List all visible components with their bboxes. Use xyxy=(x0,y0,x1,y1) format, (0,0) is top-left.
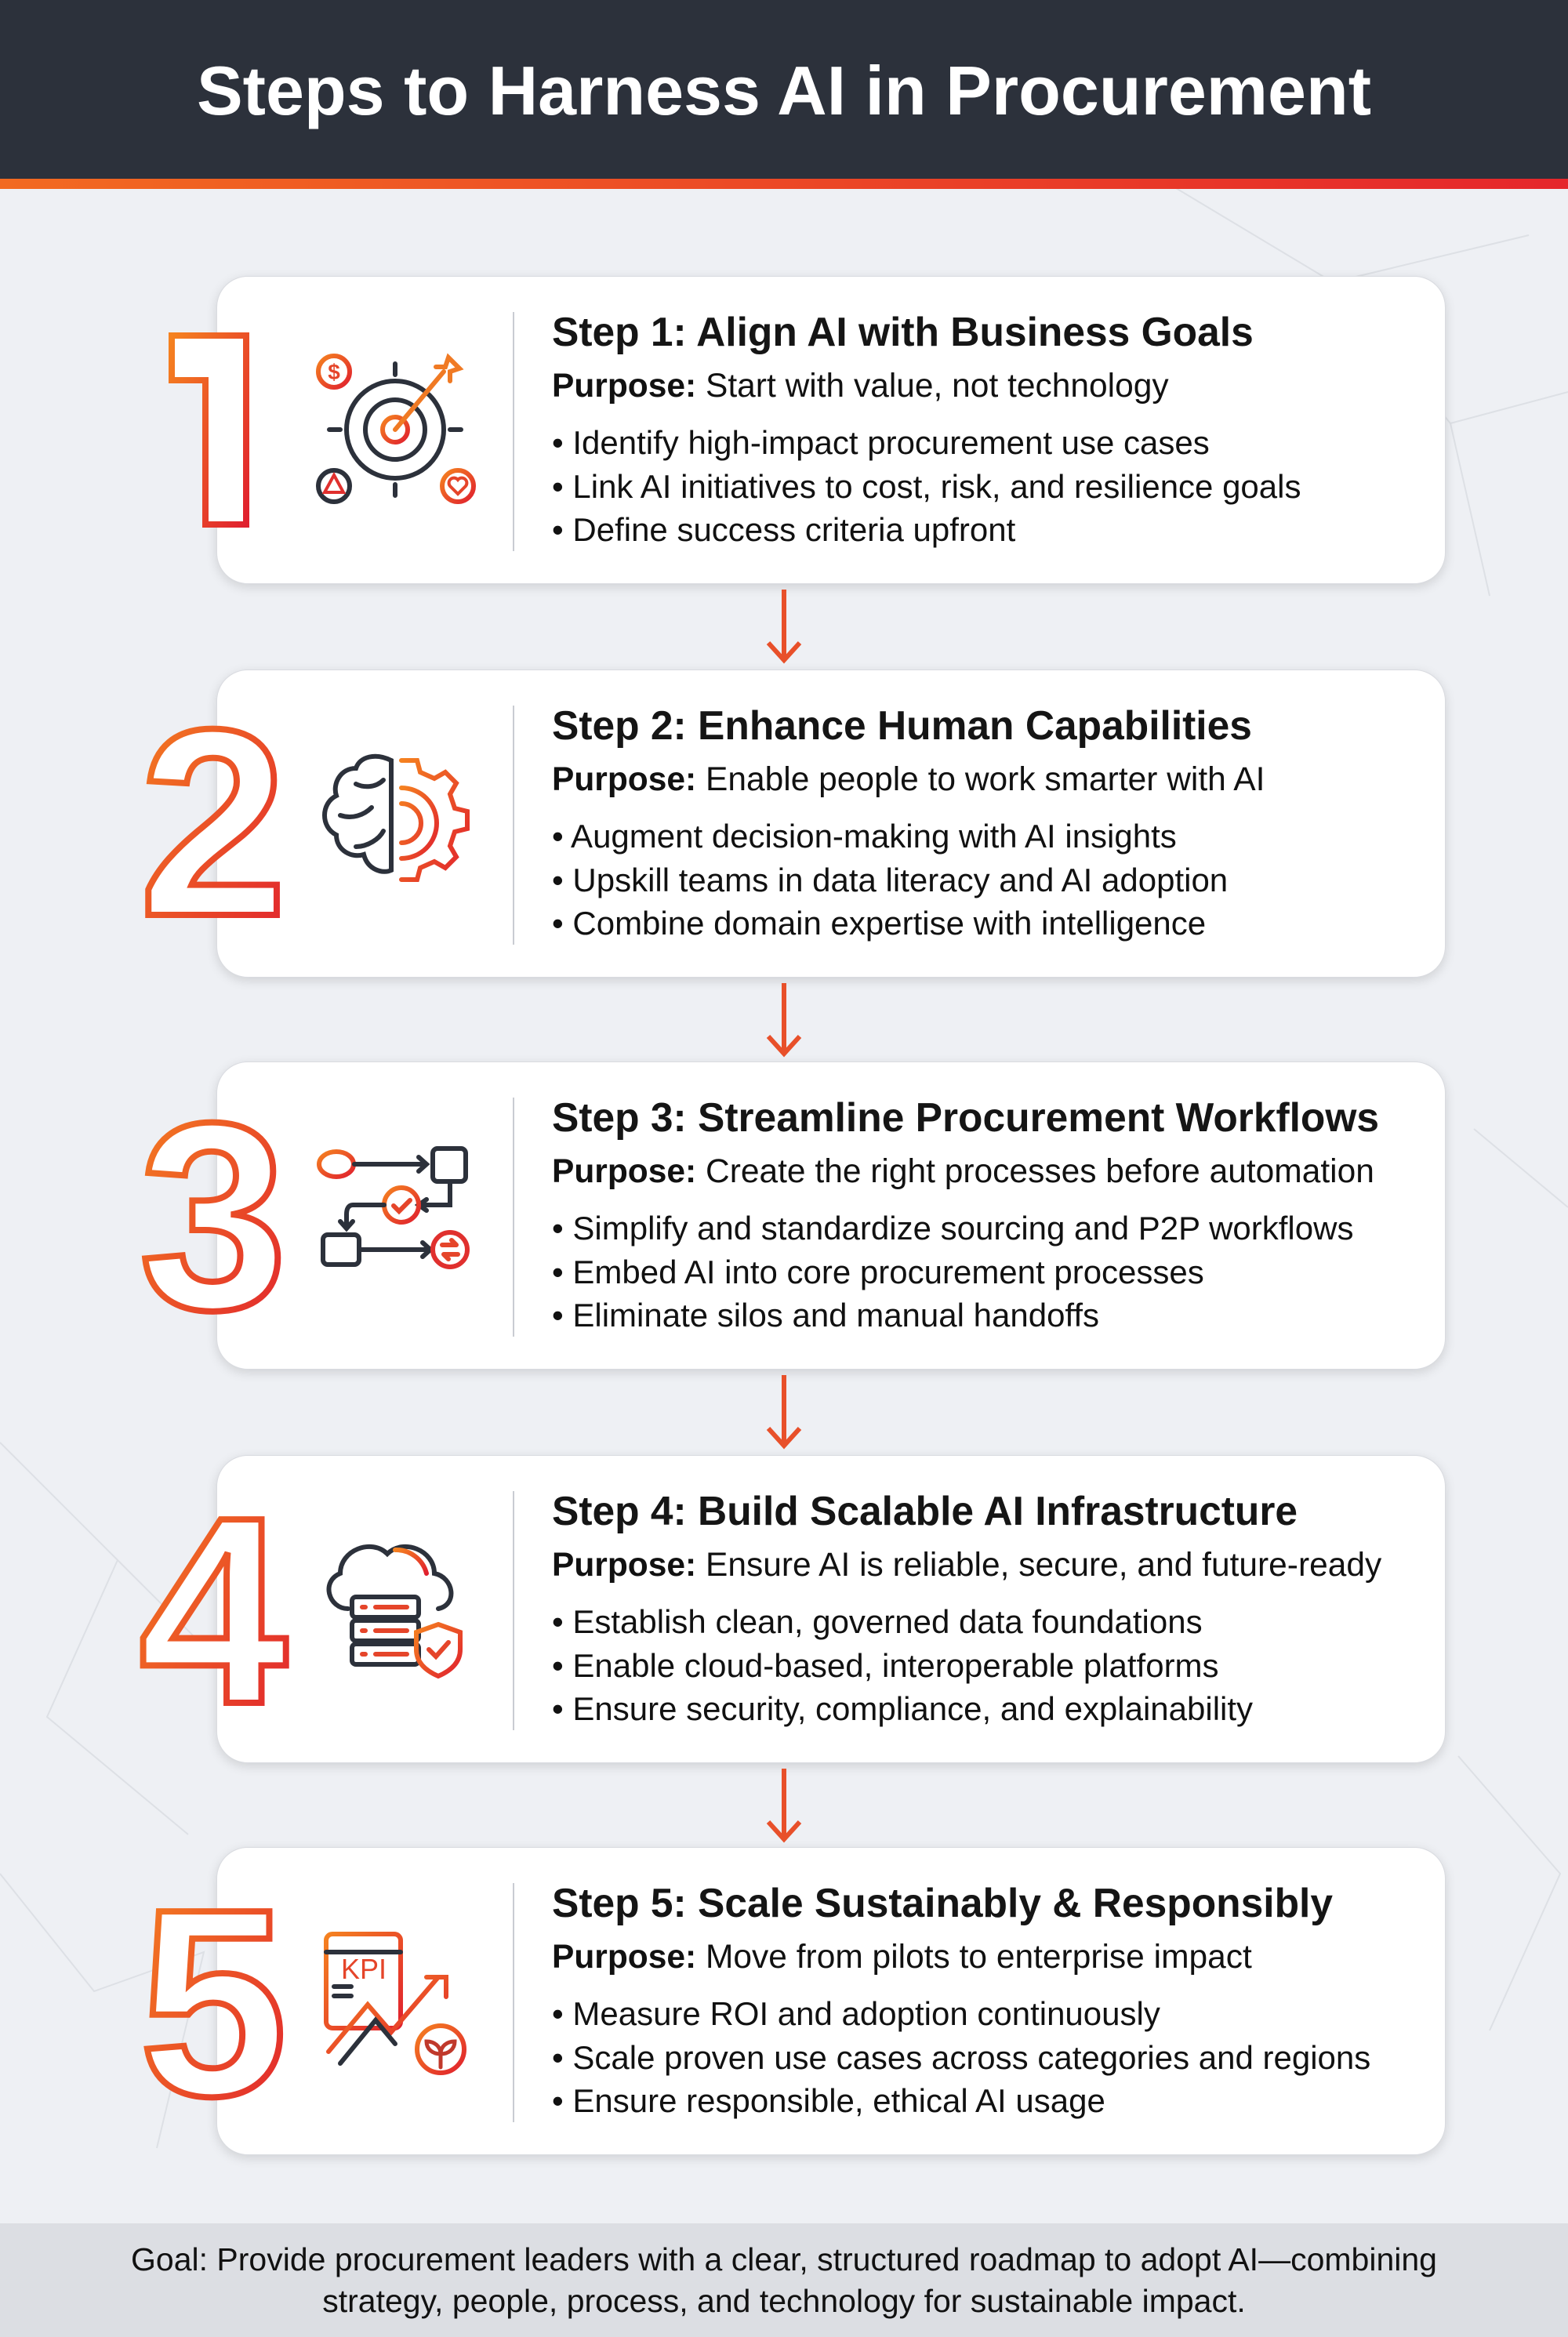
text: step 2: Step 2: Enhance Human Capabilities xyxy=(552,702,1252,748)
text: step 3: • Eliminate silos and manual handoffs xyxy=(552,1297,1099,1334)
arrow 1 xyxy=(767,590,801,663)
text: step 3 xyxy=(552,1094,1379,1334)
text: step 4: • Establish clean, governed data foundations xyxy=(552,1603,1203,1640)
text: step 2: • Combine domain expertise with intelligence xyxy=(552,905,1206,942)
text: step 5: Purpose: Move from pilots to enterprise impact xyxy=(552,1939,1252,1976)
panel: step 5 xyxy=(216,1847,1446,2155)
text: step 1: • Define success criteria upfront xyxy=(552,511,1015,548)
icon: brain gear xyxy=(322,754,470,882)
text: step 4: • Ensure security, compliance, and explainability xyxy=(552,1690,1253,1727)
title: Steps to Harness AI in Procurement xyxy=(197,52,1371,129)
text: step 5 xyxy=(552,1880,1370,2119)
panel: step 4 xyxy=(216,1455,1446,1763)
icon: workflow xyxy=(317,1146,470,1269)
text: step 4: Step 4: Build Scalable AI Infrastructure xyxy=(552,1488,1298,1533)
text: step 3: • Simplify and standardize sourcing and P2P workflows xyxy=(552,1210,1353,1247)
icon: KPI growth: KPI xyxy=(341,1953,387,1985)
icon: KPI growth xyxy=(324,1932,466,2075)
footer goal: strategy, people, process, and technology for sustainable impact. xyxy=(322,2283,1246,2319)
text: step 1: • Identify high-impact procurement use cases xyxy=(552,424,1210,461)
text: step 1: Step 1: Align AI with Business Goals xyxy=(552,309,1254,354)
text: step 4 xyxy=(552,1488,1381,1727)
arrow 4 xyxy=(767,1769,801,1842)
title xyxy=(0,0,1568,180)
footer goal xyxy=(0,2223,1568,2337)
text: step 5: • Ensure responsible, ethical AI usage xyxy=(552,2082,1105,2119)
footer goal: Goal: Provide procurement leaders with a clear, structured roadmap to adopt AI—combining xyxy=(131,2241,1437,2277)
text: step 1 xyxy=(552,309,1301,548)
number 1 xyxy=(169,332,249,528)
text: step 5: • Scale proven use cases across categories and regions xyxy=(552,2038,1370,2076)
text: step 2 xyxy=(552,702,1265,942)
panel: step 1 xyxy=(216,276,1446,584)
text: step 2: • Augment decision-making with AI insights xyxy=(552,818,1177,855)
icon: target xyxy=(316,353,476,504)
text: step 4: • Enable cloud-based, interoperable platforms xyxy=(552,1646,1219,1684)
icon: cloud server xyxy=(326,1544,463,1679)
panel: step 2 xyxy=(216,670,1446,978)
text: step 5: • Measure ROI and adoption continuously xyxy=(552,1995,1160,2032)
text: step 1: • Link AI initiatives to cost, risk, and resilience goals xyxy=(552,467,1301,505)
arrow 2 xyxy=(767,983,801,1057)
panel: step 3 xyxy=(216,1061,1446,1370)
text: step 3: • Embed AI into core procurement processes xyxy=(552,1253,1204,1290)
text: step 5: Step 5: Scale Sustainably & Responsibly xyxy=(552,1880,1333,1925)
icon: target: $ xyxy=(328,360,340,384)
text: step 2: • Upskill teams in data literacy and AI adoption xyxy=(552,861,1228,898)
arrow 3 xyxy=(767,1375,801,1449)
text: step 3: Step 3: Streamline Procurement Workflows xyxy=(552,1094,1379,1140)
text: step 1: Purpose: Start with value, not technology xyxy=(552,368,1169,405)
text: step 2: Purpose: Enable people to work smarter with AI xyxy=(552,761,1265,798)
text: step 4: Purpose: Ensure AI is reliable, secure, and future-ready xyxy=(552,1547,1381,1584)
text: step 3: Purpose: Create the right processes before automation xyxy=(552,1153,1374,1190)
